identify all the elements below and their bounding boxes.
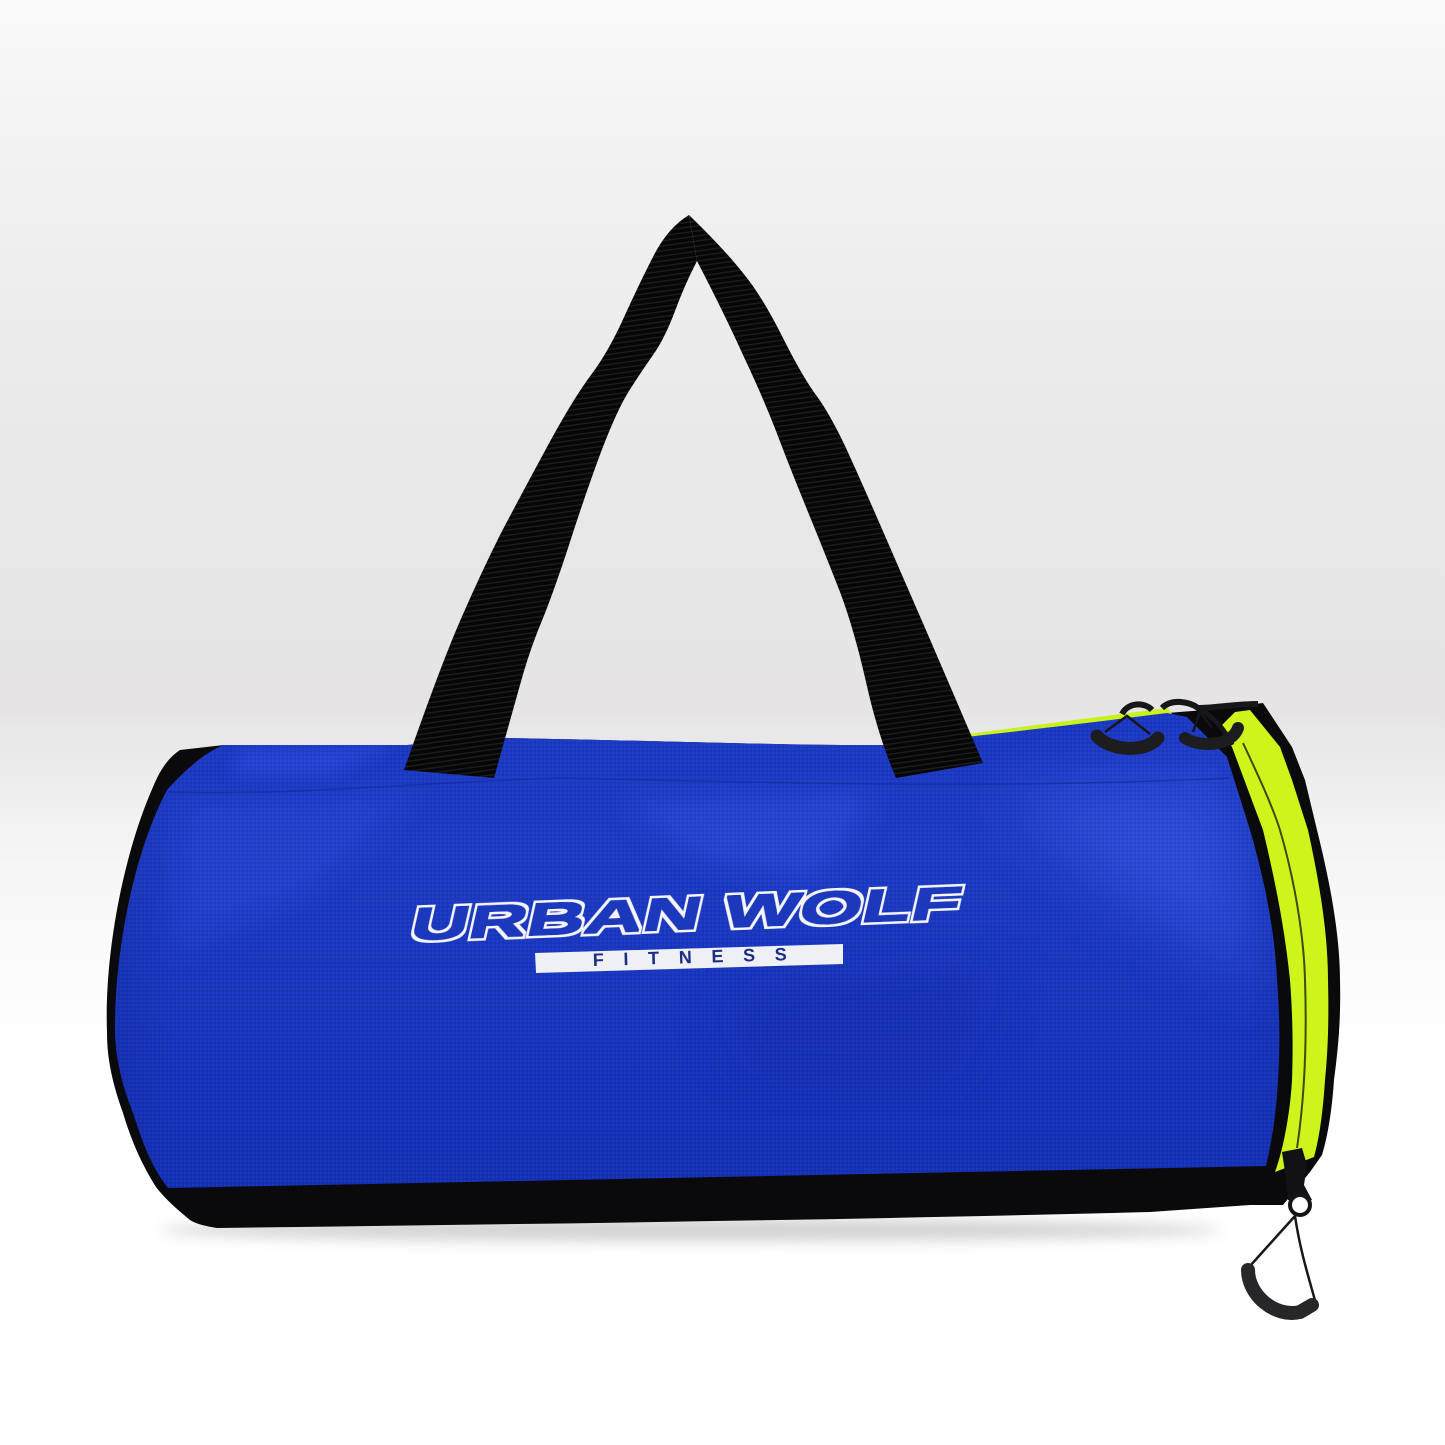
right puller hook — [1185, 728, 1238, 744]
puller ring — [1290, 1195, 1310, 1215]
left puller cord — [1105, 712, 1212, 734]
zipper centre line — [1243, 743, 1306, 1148]
ground shadow — [160, 1219, 1220, 1241]
left handle strap — [404, 215, 697, 778]
logo subtitle: FITNESS — [593, 944, 787, 970]
logo wordmark: URBAN WOLF — [406, 877, 967, 950]
top zipper pullers — [1097, 702, 1258, 748]
lime trim along the top — [886, 708, 1172, 749]
right handle strap — [689, 215, 983, 778]
bag body — [100, 700, 1340, 1228]
zipper tape and sliders — [1122, 702, 1258, 714]
black outer body and end panel — [107, 703, 1340, 1228]
logo: URBAN WOLF FITNESS — [406, 877, 967, 973]
left puller hook — [1097, 736, 1158, 748]
zipper slider — [1282, 1148, 1312, 1200]
logo bar — [535, 944, 843, 973]
blue fabric panel — [100, 700, 1320, 1200]
zipper band — [1220, 710, 1328, 1172]
bottom zipper puller — [1248, 1148, 1316, 1313]
puller cord — [1250, 1216, 1316, 1304]
puller hook — [1248, 1270, 1312, 1313]
